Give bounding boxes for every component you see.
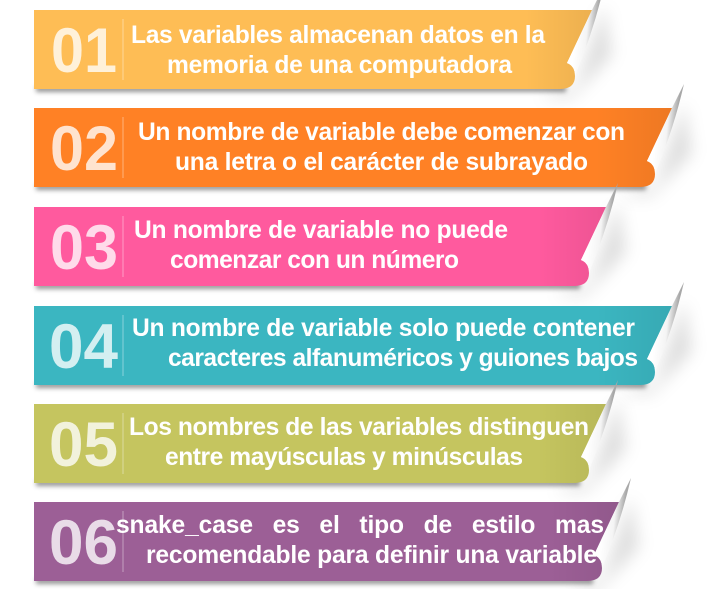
text 03: [134, 217, 508, 274]
text 01: Las variables almacenan datos en la: [131, 22, 545, 49]
banner 01: [34, 0, 612, 98]
number 06: 06: [49, 508, 118, 578]
banner 02: [34, 84, 692, 196]
number 05: 05: [49, 410, 118, 480]
text 03: comenzar con un número: [170, 247, 459, 274]
banner 06: [34, 478, 639, 589]
text 04: Un nombre de variable solo puede contener: [132, 315, 635, 342]
text 06: snake_case es el tipo de estilo mas: [116, 512, 604, 539]
text 01: memoria de una computadora: [167, 52, 512, 79]
text 04: [132, 315, 638, 372]
text 06: recomendable para definir una variable: [146, 542, 597, 569]
text 05: [129, 414, 589, 471]
text 02: [138, 119, 625, 176]
text 01: [131, 22, 545, 79]
text 04: caracteres alfanuméricos y guiones bajos: [168, 345, 638, 372]
text 06: [116, 512, 604, 569]
text 03: Un nombre de variable no puede: [134, 217, 508, 244]
number 04: 04: [49, 312, 118, 382]
text 02: Un nombre de variable debe comenzar con: [138, 119, 625, 146]
number 01: 01: [51, 16, 117, 86]
number 02: 02: [50, 114, 118, 184]
text 05: Los nombres de las variables distinguen: [129, 414, 589, 441]
number 03: 03: [50, 213, 118, 283]
banner 04: [34, 282, 692, 394]
text 02: una letra o el carácter de subrayado: [175, 149, 588, 176]
banner 03: [34, 183, 626, 295]
banner 05: [34, 380, 626, 492]
text 05: entre mayúsculas y minúsculas: [165, 444, 523, 471]
